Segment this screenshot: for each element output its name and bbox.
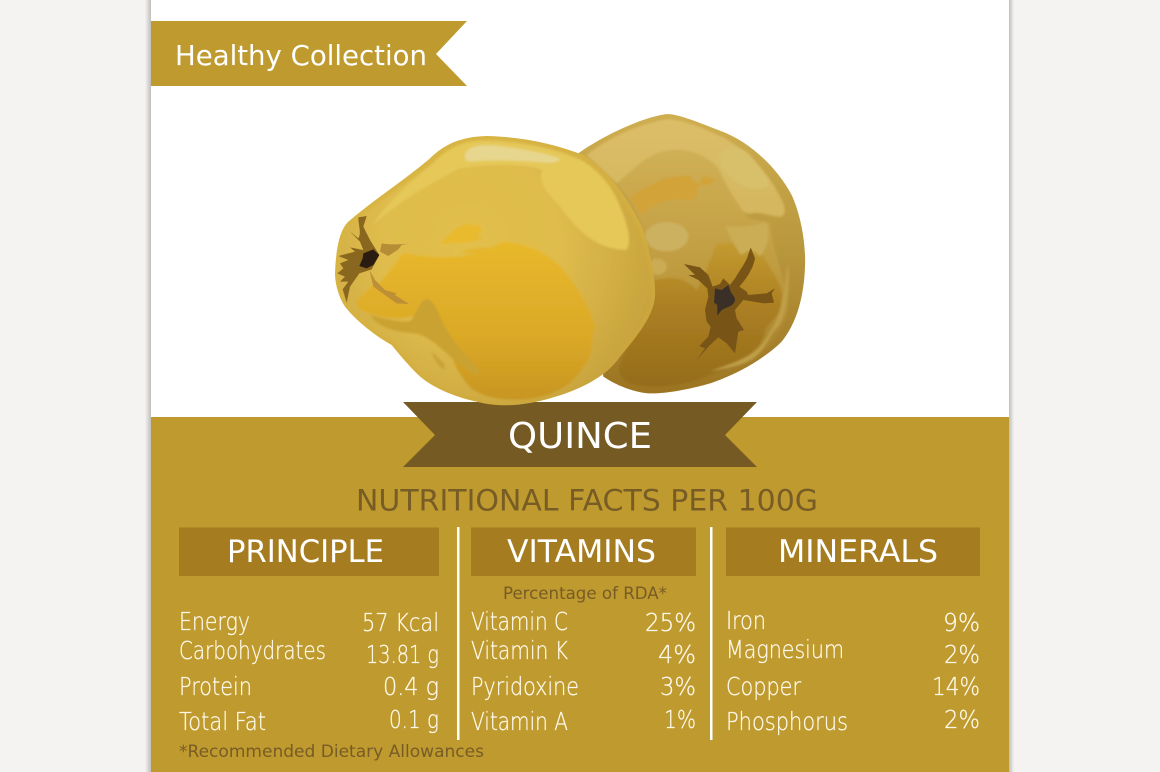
front quince calyx	[337, 216, 417, 304]
rows: minerals: 14%	[932, 672, 980, 701]
rows: vitamins: Vitamin A	[471, 707, 568, 736]
rows: minerals	[726, 606, 980, 736]
ribbon title: QUINCE	[508, 416, 652, 457]
header: principle: PRINCIPLE	[227, 534, 384, 570]
rows: vitamins: 4%	[658, 640, 696, 669]
front quince	[335, 136, 655, 405]
rows: vitamins: Pyridoxine	[471, 672, 579, 701]
rows: principle: Protein	[179, 672, 252, 701]
rows: principle: 0.1 g	[389, 705, 439, 734]
nutrition panel background	[151, 417, 1009, 772]
header: vitamins: VITAMINS	[507, 534, 656, 570]
rows: vitamins	[471, 607, 696, 736]
rows: vitamins: Vitamin K	[471, 636, 568, 665]
header: minerals: MINERALS	[778, 534, 938, 570]
rows: minerals: Iron	[726, 606, 766, 635]
rows: principle: 13.81 g	[366, 640, 439, 669]
rows: principle: 57 Kcal	[362, 608, 439, 637]
illustration: two quinces	[335, 114, 805, 405]
rows: vitamins: 3%	[660, 672, 696, 701]
footnote: *Recommended Dietary Allowances	[179, 742, 484, 761]
rows: minerals: 9%	[943, 608, 980, 637]
header: minerals	[726, 528, 980, 576]
rows: principle: 0.4 g	[383, 672, 439, 701]
header: vitamins	[471, 528, 696, 576]
rows: principle: Carbohydrates	[179, 636, 326, 665]
banner: Healthy Collection: Healthy Collection	[175, 39, 427, 72]
rows: vitamins: Vitamin C	[471, 607, 568, 636]
rows: minerals: Magnesium	[726, 635, 844, 664]
rows: principle: Energy	[179, 607, 250, 636]
rows: minerals: Phosphorus	[726, 707, 848, 736]
ribbon: Quince background	[403, 402, 757, 467]
rows: vitamins: 1%	[664, 705, 696, 734]
rows: principle	[179, 607, 439, 736]
back quince calyx	[684, 247, 775, 361]
subheading: percentage of RDA: Percentage of RDA*	[503, 584, 667, 603]
rows: vitamins: 25%	[645, 608, 696, 637]
banner: Healthy Collection	[151, 21, 467, 86]
rows: minerals: 2%	[944, 640, 980, 669]
header: principle	[179, 528, 439, 576]
rows: principle: Total Fat	[179, 707, 266, 736]
heading: nutritional facts: NUTRITIONAL FACTS PER 100G	[356, 484, 818, 518]
column: principle	[179, 528, 439, 736]
rows: minerals: 2%	[944, 705, 980, 734]
column: vitamins	[471, 528, 696, 736]
rows: minerals: Copper	[726, 672, 802, 701]
column: minerals	[726, 528, 980, 736]
column dividers	[457, 527, 712, 740]
back quince	[578, 114, 805, 393]
page sheet	[145, 0, 1014, 772]
